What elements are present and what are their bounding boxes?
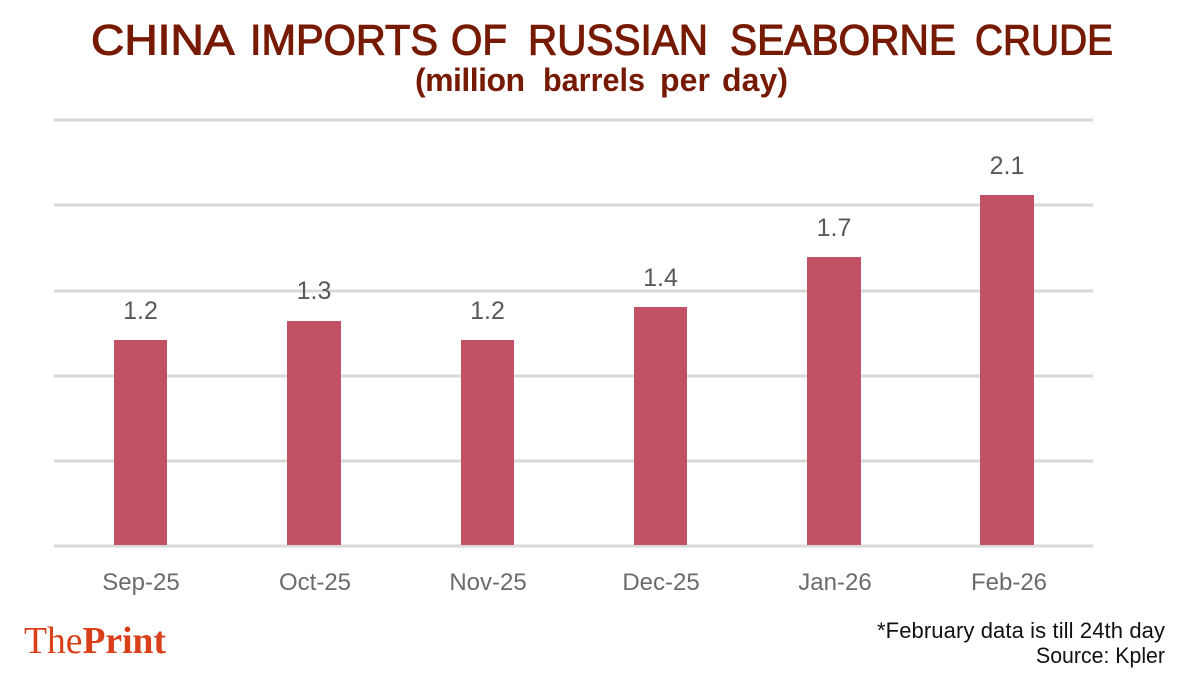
title: OF: [451, 16, 507, 64]
subtitle: per: [660, 62, 710, 98]
bar: Sep-25: 1.2: [123, 297, 158, 325]
bar: Nov-25: 1.2: [470, 297, 505, 325]
title: RUSSIAN: [528, 16, 708, 64]
logo: ThePrint: ThePrint: [24, 620, 166, 662]
bar: Feb-26: [971, 152, 1047, 596]
bar chart: [54, 120, 1093, 596]
bar: Oct-25: Oct-25: [279, 569, 351, 596]
title: SEABORNE: [730, 16, 956, 64]
subtitle: (million: [415, 62, 525, 98]
bar: Feb-26: Feb-26: [971, 569, 1047, 596]
bar: Dec-25: 1.4: [643, 264, 678, 292]
bar: Dec-25: [622, 264, 700, 596]
bar: Oct-25: [279, 277, 351, 596]
bar: Jan-26: [798, 214, 872, 596]
bar: Jan-26: Jan-26: [798, 569, 872, 596]
footnote: *February data is till 24th day: [877, 618, 1165, 643]
bar: Jan-26: 1.7: [817, 214, 851, 242]
title: CRUDE: [975, 16, 1113, 64]
source: Source: Kpler: [1036, 643, 1165, 668]
bar: Sep-25: [102, 297, 180, 596]
subtitle: barrels: [543, 62, 645, 98]
bar: Sep-25: Sep-25: [102, 569, 180, 596]
bar: Dec-25: Dec-25: [622, 569, 700, 596]
title: CHINA: [91, 16, 235, 64]
bar: Feb-26: 2.1: [990, 152, 1024, 180]
bar: Nov-25: [449, 297, 527, 596]
bar: Oct-25: 1.3: [297, 277, 331, 305]
title: IMPORTS: [250, 16, 438, 64]
subtitle: day): [722, 62, 788, 98]
bar: Nov-25: Nov-25: [449, 569, 527, 596]
